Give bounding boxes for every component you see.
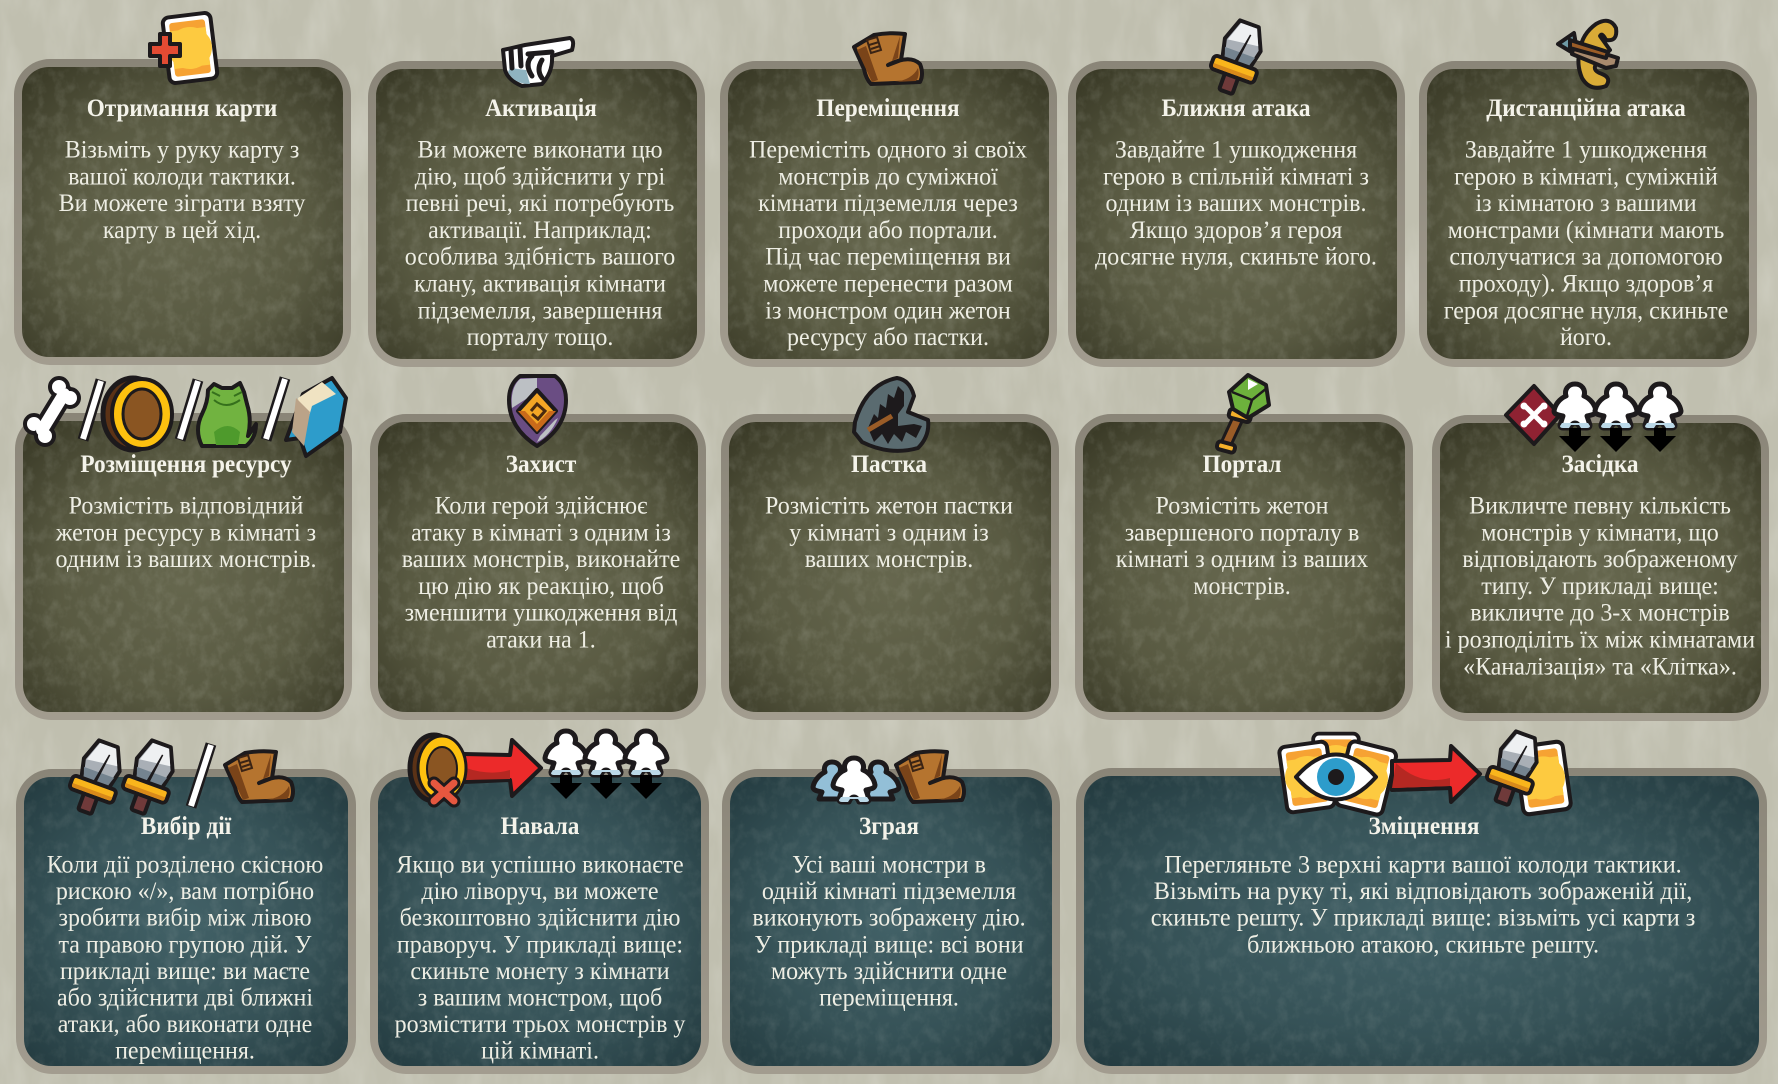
text block: монстрів.: [1193, 572, 1291, 600]
text block: досягне нуля, скиньте його.: [1095, 243, 1377, 271]
panel: Пастка: [721, 378, 1059, 720]
text block: «Каналізація» та «Клітка».: [1463, 653, 1737, 680]
text block: Завдайте 1 ушкодження: [1465, 136, 1707, 164]
text block: вашої колоди тактики.: [68, 163, 296, 190]
text block: монстрів до суміжної: [778, 163, 998, 190]
text block: відповідають зображеному: [1462, 546, 1739, 573]
panel: Розміщення ресурсу: [15, 378, 352, 720]
heading: Вибір дії: [141, 812, 231, 840]
icon: bear trap: [854, 378, 928, 451]
text block: переміщення.: [819, 984, 959, 1012]
icon: reinforce: [1279, 727, 1571, 816]
text block: атаки, або виконати одне: [58, 1011, 312, 1038]
text block: Розмістіть жетон: [1156, 492, 1328, 520]
heading: Ближня атака: [1161, 94, 1311, 122]
text block: активації. Наприклад:: [428, 216, 652, 244]
icon: dagger: [1204, 16, 1272, 100]
text block: Перемістіть одного зі своїх: [749, 136, 1027, 164]
icon: arrow and bow: [1558, 21, 1618, 88]
text block: героя досягне нуля, скиньте: [1444, 297, 1728, 324]
text block: Під час переміщення ви: [765, 243, 1011, 271]
icon: portal wand: [1216, 375, 1269, 453]
text block: атаку в кімнаті з одним із: [411, 519, 671, 546]
text block: із монстром один жетон: [765, 297, 1011, 324]
text block: У прикладі вище: всі вони: [754, 931, 1024, 958]
heading: Пастка: [851, 450, 927, 478]
icon: card with plus: [150, 12, 218, 84]
text block: рискою «/», вам потрібно: [56, 878, 314, 905]
text block: та правою групою дій. У: [58, 931, 312, 958]
text block: скиньте решту. У прикладі вище: візьміть усі карти з: [1151, 904, 1695, 932]
text block: зробити вибір між лівою: [58, 904, 312, 932]
text block: праворуч. У прикладі вище:: [397, 931, 683, 958]
text block: завершеного порталу в: [1125, 519, 1359, 546]
text block: одним із ваших монстрів.: [1106, 190, 1366, 217]
text block: певні речі, які потребують: [406, 190, 674, 217]
text block: зменшити ушкодження від: [405, 599, 677, 627]
icon: shield: [509, 376, 566, 446]
heading: Отримання карти: [87, 94, 277, 122]
text block: Ви можете виконати цю: [417, 136, 663, 164]
text block: монстрів у кімнати, що: [1481, 519, 1719, 546]
panel: Ближня атака: [1068, 16, 1405, 367]
text block: у кімнаті з одним із: [789, 519, 989, 546]
icon: boot: [854, 33, 922, 84]
panel: Зграя: [722, 751, 1060, 1074]
text block: атаки на 1.: [486, 626, 596, 654]
text block: герою в спільній кімнаті з: [1103, 163, 1369, 190]
text block: скиньте монету з кімнати: [410, 957, 670, 985]
text block: одним із ваших монстрів.: [56, 546, 316, 573]
icon: pointing hand: [503, 38, 573, 86]
text block: сполучатися за допомогою: [1449, 243, 1723, 271]
heading: Захист: [506, 450, 576, 478]
text block: Коли дії розділено скісною: [47, 851, 323, 879]
text block: розмістити трьох монстрів у: [395, 1011, 686, 1038]
panel: Активація: [368, 38, 705, 367]
icon: resources: [25, 378, 346, 456]
text block: кімнаті з одним із ваших: [1116, 546, 1368, 573]
heading: Навала: [501, 812, 579, 840]
text block: жетон ресурсу в кімнаті з: [55, 519, 316, 546]
text block: Усі ваші монстри в: [792, 851, 986, 879]
icon: ambush: [1506, 384, 1681, 452]
text block: проходи або портали.: [778, 216, 998, 244]
heading: Портал: [1203, 450, 1281, 478]
text block: Розмістіть відповідний: [69, 492, 303, 520]
heading: Зграя: [859, 812, 919, 840]
text block: карту в цей хід.: [103, 216, 261, 244]
panel: Зміцнення: [1076, 727, 1767, 1074]
panel: Вибір дії: [16, 736, 356, 1074]
text block: Візьміть у руку карту з: [65, 136, 299, 164]
panel: Навала: [370, 731, 709, 1074]
text block: прикладі вище: ви маєте: [60, 957, 310, 985]
panel: Засідка: [1432, 384, 1769, 721]
heading: Розміщення ресурсу: [80, 450, 292, 478]
icon: rush: [410, 731, 667, 801]
text block: його.: [1560, 324, 1612, 351]
text block: можуть здійснити одне: [771, 957, 1007, 985]
text block: дію ліворуч, ви можете: [421, 878, 659, 905]
icon: choice: [63, 736, 293, 820]
text block: Візьміть на руку ті, які відповідають зображеній дії,: [1154, 878, 1692, 905]
text block: Якщо здоров’я героя: [1130, 216, 1342, 244]
heading: Засідка: [1561, 450, 1639, 478]
text block: або здійснити дві ближні: [57, 984, 313, 1012]
text block: кімнати підземелля через: [758, 190, 1018, 217]
text block: Коли герой здійснює: [435, 492, 648, 520]
text block: монстрами (кімнати мають: [1448, 216, 1724, 244]
text block: ближньою атакою, скиньте решту.: [1247, 931, 1599, 958]
text block: проходу). Якщо здоров’я: [1459, 270, 1713, 298]
text block: ресурсу або пастки.: [787, 324, 989, 351]
text block: безкоштовно здійснити дію: [400, 904, 680, 932]
text block: цій кімнаті.: [481, 1037, 599, 1065]
text block: Перегляньте 3 верхні карти вашої колоди тактики.: [1164, 851, 1682, 879]
heading: Зміцнення: [1369, 812, 1479, 840]
text block: можете перенести разом: [763, 270, 1013, 298]
panel: Захист: [370, 376, 706, 720]
text block: із кімнатою з вашими: [1475, 190, 1697, 217]
panel: Отримання карти: [14, 12, 351, 365]
text block: дію, щоб здійснити у грі: [415, 163, 665, 190]
heading: Дистанційна атака: [1486, 94, 1686, 122]
panel: Переміщення: [720, 33, 1057, 367]
text block: особлива здібність вашого: [405, 243, 675, 271]
text block: виконують зображену дію.: [752, 904, 1026, 932]
text block: клану, активація кімнати: [414, 270, 666, 298]
text block: викличте до 3-х монстрів: [1470, 599, 1730, 627]
text block: герою в кімнаті, суміжній: [1454, 163, 1718, 190]
text block: одній кімнаті підземелля: [762, 878, 1016, 905]
text block: підземелля, завершення: [418, 297, 662, 324]
text block: Викличте певну кількість: [1469, 492, 1731, 520]
text block: Ви можете зіграти взяту: [59, 190, 306, 217]
heading: Активація: [485, 94, 597, 122]
text block: Розмістіть жетон пастки: [765, 492, 1013, 520]
text block: Якщо ви успішно виконаєте: [396, 851, 684, 879]
heading: Переміщення: [816, 94, 960, 122]
icon: pack: [813, 751, 964, 802]
text block: цю дію як реакцію, щоб: [418, 572, 664, 600]
text block: ваших монстрів, виконайте: [402, 546, 680, 573]
text block: і розподіліть їх між кімнатами: [1445, 626, 1755, 654]
text block: ваших монстрів.: [805, 546, 973, 573]
text block: порталу тощо.: [467, 324, 613, 351]
panel: Портал: [1075, 375, 1413, 720]
panel: Дистанційна атака: [1419, 21, 1757, 367]
text block: з вашим монстром, щоб: [418, 984, 662, 1012]
text block: переміщення.: [115, 1037, 255, 1065]
text block: Завдайте 1 ушкодження: [1115, 136, 1357, 164]
text block: типу. У прикладі вище:: [1481, 572, 1719, 600]
